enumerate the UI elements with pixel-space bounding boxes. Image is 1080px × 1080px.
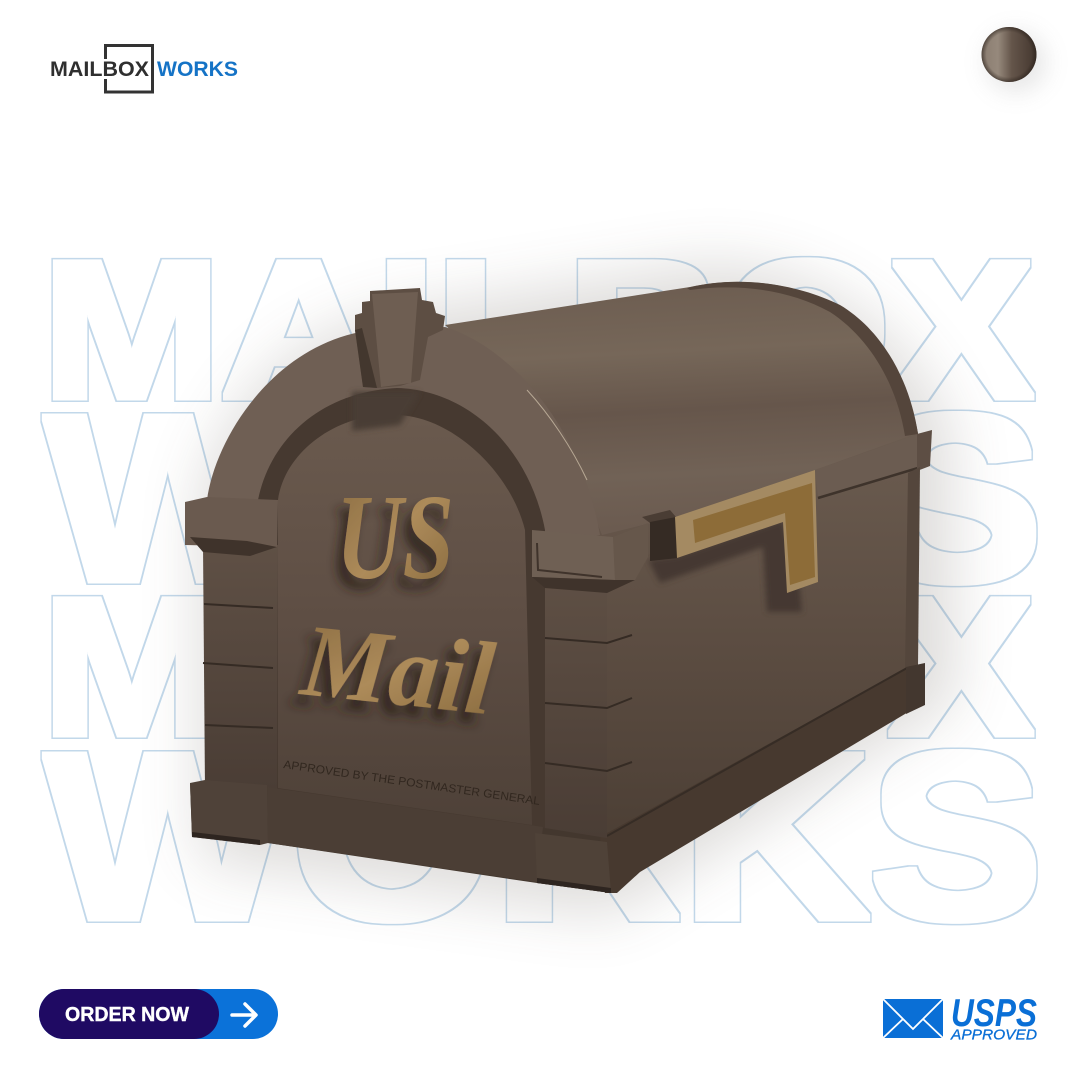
- US lettering: US: [336, 470, 454, 605]
- USPS wordmark: USPS: [951, 992, 1037, 1035]
- flag texture: [693, 483, 815, 585]
- mailbox domed roof: [445, 282, 918, 535]
- outline word WORKS top: WORKS: [45, 366, 1043, 631]
- embossed approval line: APPROVED BY THE POSTMASTER GENERAL: [283, 759, 541, 808]
- mailbox side body: [590, 433, 918, 842]
- arch highlight crease: [527, 390, 587, 480]
- rear clip: [917, 430, 932, 471]
- rear base block: [906, 663, 925, 714]
- mailbox illustration: [185, 282, 932, 893]
- outline word MAILBOX top: MAILBOX: [42, 221, 1033, 439]
- front raised panel: [278, 415, 532, 825]
- logo word MAILBOX: MAILBOX: [50, 57, 150, 81]
- side base: [600, 666, 910, 893]
- keystone ornament: [355, 288, 445, 388]
- band shadow line: [818, 468, 918, 498]
- left pillar with bricks: [203, 545, 278, 790]
- APPROVED wordmark: APPROVED: [950, 1026, 1037, 1044]
- envelope icon: [883, 999, 943, 1038]
- right base block: [535, 833, 611, 893]
- logo word WORKS: WORKS: [157, 57, 238, 81]
- roof rear rim: [687, 282, 918, 436]
- left base block: [190, 780, 268, 845]
- front base plinth: [267, 787, 543, 882]
- right pillar with bricks: [545, 570, 632, 838]
- button label: ORDER NOW: [65, 1004, 189, 1026]
- side band: [815, 434, 918, 498]
- left capital: [185, 497, 278, 556]
- order now button: [39, 989, 278, 1039]
- outline word MAILBOX bottom: MAILBOX: [42, 558, 1033, 776]
- front recessed panel: [258, 388, 545, 828]
- keystone shadow: [352, 392, 420, 431]
- flag arm: [642, 510, 678, 561]
- soft shadow behind mailbox: [200, 265, 955, 915]
- usps approved badge: [883, 992, 1037, 1044]
- button blue base: [39, 989, 278, 1039]
- logo square frame: [106, 46, 152, 92]
- outline word WORKS bottom: WORKS: [45, 704, 1043, 969]
- bronze flag: [675, 470, 818, 593]
- flag shadow: [648, 520, 802, 612]
- base underlay: [190, 783, 611, 893]
- Mail lettering: Mail: [295, 602, 500, 737]
- base top lip: [607, 668, 907, 836]
- right capital: [532, 523, 648, 593]
- logo: [50, 46, 238, 92]
- background outline lettering: [42, 221, 1043, 969]
- arch outer band: [207, 327, 600, 545]
- rear edge strip: [905, 467, 920, 672]
- arrow icon: [232, 1004, 256, 1026]
- button dark pill: [39, 989, 219, 1039]
- colour swatch: bronze sphere: [982, 27, 1046, 92]
